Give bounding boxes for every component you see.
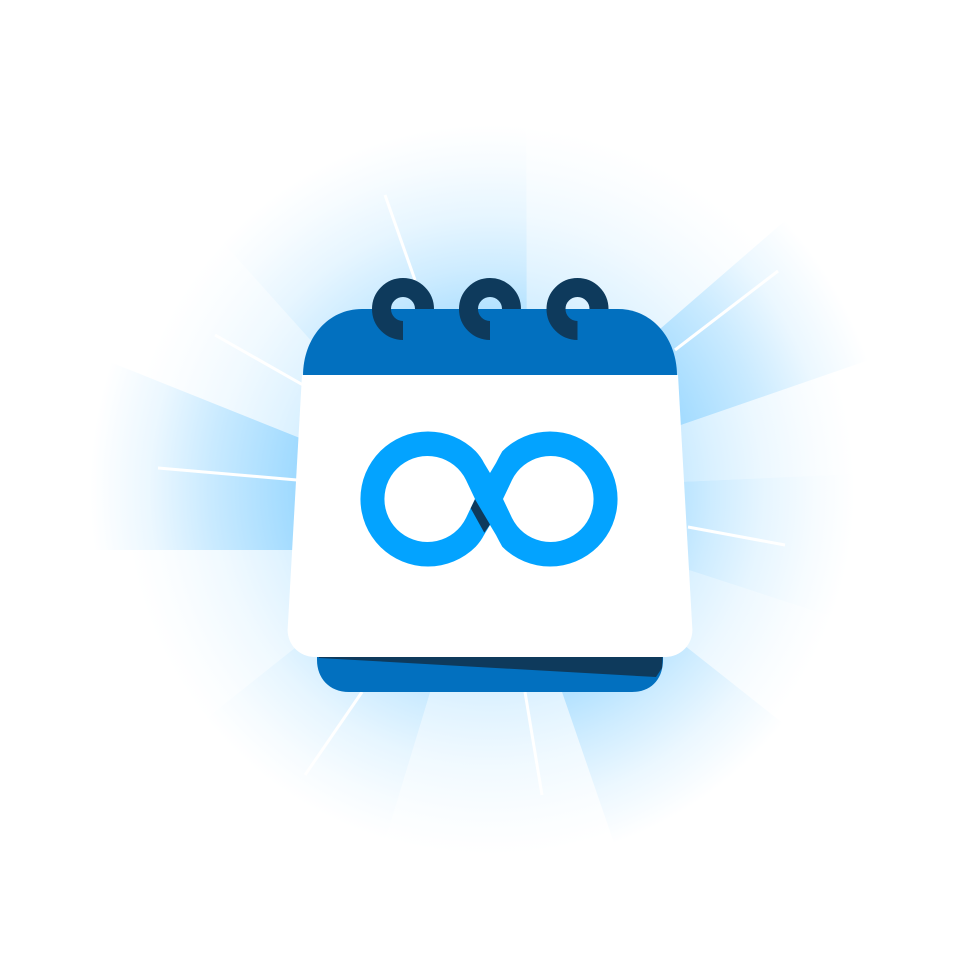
ray: lower left faint <box>50 550 320 843</box>
icon: infinity symbol <box>360 431 618 566</box>
ray: left <box>50 338 320 550</box>
ray: lower right faint <box>658 560 950 816</box>
ray: bottom right <box>552 626 900 930</box>
ray: right faint <box>652 332 950 483</box>
calendar header <box>303 309 677 376</box>
ray: bottom left <box>50 628 439 930</box>
ray: right <box>654 470 950 655</box>
ray: bottom centre <box>358 663 644 930</box>
calendar back pages <box>317 650 663 692</box>
ray: top left <box>130 60 527 373</box>
white ray lines <box>158 195 785 795</box>
ray: upper right <box>630 121 950 435</box>
calendar <box>288 288 692 692</box>
ray: upper left faint <box>50 139 340 446</box>
binder rings <box>382 288 599 330</box>
calendar white page <box>288 375 692 657</box>
ray: top right faint <box>526 60 900 373</box>
